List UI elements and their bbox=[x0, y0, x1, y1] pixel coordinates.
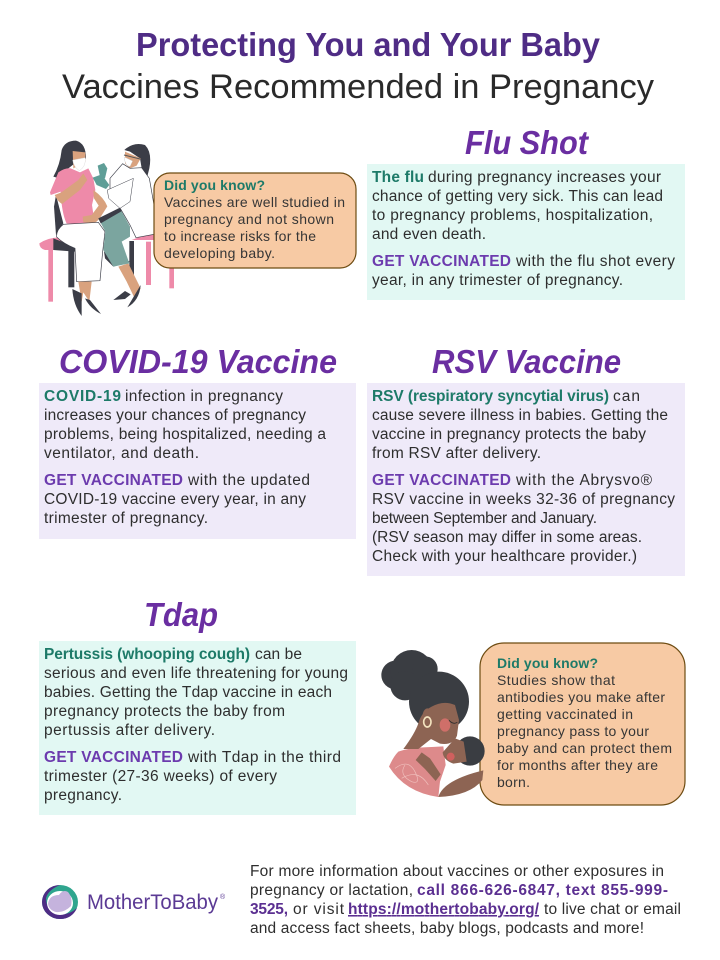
title bbox=[62, 26, 654, 106]
callout: did you know, antibodies: pregnancy pass to your bbox=[497, 723, 649, 739]
panel: flu shot: chance of getting very sick. This can lead bbox=[372, 188, 663, 205]
panel: tdap: serious and even life threatening for young bbox=[44, 665, 348, 682]
callout: did you know, antibodies: baby and can protect them bbox=[497, 740, 672, 756]
panel: tdap: pregnancy. bbox=[44, 787, 122, 804]
panel: tdap: pertussis after delivery. bbox=[44, 722, 215, 739]
logo: MotherToBaby: MotherToBaby bbox=[87, 891, 218, 914]
logo: MotherToBaby: ® bbox=[220, 893, 226, 901]
panel: covid-19 vaccine: ventilator, and death. bbox=[44, 445, 199, 462]
footer contact text bbox=[250, 863, 681, 937]
panel: tdap: GET VACCINATED bbox=[44, 749, 183, 766]
panel: rsv vaccine: GET VACCINATED bbox=[372, 472, 511, 489]
footer contact text: For more information about vaccines or other exposures in bbox=[250, 863, 664, 880]
footer contact text: to live chat or email bbox=[544, 901, 681, 918]
panel: flu shot: The flu bbox=[372, 169, 424, 186]
panel: tdap: Pertussis (whooping cough) bbox=[44, 646, 250, 663]
panel: covid-19 vaccine bbox=[39, 383, 356, 539]
panel: covid-19 vaccine: with the updated bbox=[187, 472, 310, 489]
panel: rsv vaccine: (RSV season may differ in some areas. bbox=[372, 529, 642, 546]
panel: tdap: can be bbox=[255, 646, 302, 663]
footer contact text: pregnancy or lactation, bbox=[250, 882, 413, 899]
panel: covid-19 vaccine: GET VACCINATED bbox=[44, 472, 183, 489]
footer contact text: and access fact sheets, baby blogs, podcasts and more! bbox=[250, 920, 644, 937]
panel: tdap: with Tdap in the third bbox=[187, 749, 341, 766]
panel: tdap: trimester (27-36 weeks) of every bbox=[44, 768, 277, 785]
panel: rsv vaccine: can bbox=[613, 388, 640, 405]
panel: covid-19 vaccine: problems, being hospitalized, needing a bbox=[44, 426, 326, 443]
callout: did you know, vaccines studied: Vaccines are well studied in bbox=[164, 194, 345, 210]
callout: did you know, vaccines studied bbox=[154, 173, 356, 268]
panel: tdap bbox=[39, 641, 356, 815]
callout: did you know, antibodies: Did you know? bbox=[497, 655, 598, 671]
panel: rsv vaccine bbox=[367, 383, 685, 576]
callout: did you know, antibodies bbox=[480, 643, 685, 805]
footer contact text: call 866-626-6847, text 855-999- bbox=[417, 882, 668, 899]
callout: did you know, antibodies: antibodies you make after bbox=[497, 689, 665, 705]
callout: did you know, vaccines studied: to increase risks for the bbox=[164, 228, 316, 244]
panel: flu shot: GET VACCINATED bbox=[372, 253, 511, 270]
panel: rsv vaccine: from RSV after delivery. bbox=[372, 445, 541, 462]
footer contact text: https://mothertobaby.org/ bbox=[348, 901, 540, 918]
callout: did you know, vaccines studied: pregnancy and not shown bbox=[164, 211, 334, 227]
panel: rsv vaccine: with the Abrysvo® bbox=[515, 472, 653, 489]
heading: covid-19 vaccine: COVID-19 Vaccine bbox=[59, 343, 337, 380]
illustration: pregnant woman receiving vaccine from a healthcare worker bbox=[39, 141, 174, 316]
panel: covid-19 vaccine: infection in pregnancy bbox=[125, 388, 283, 405]
panel: flu shot: year, in any trimester of pregnancy. bbox=[372, 272, 623, 289]
panel: covid-19 vaccine: COVID-19 vaccine every year, in any bbox=[44, 491, 306, 508]
illustration: mother kissing her baby bbox=[381, 650, 485, 797]
callout: did you know, antibodies: born. bbox=[497, 774, 530, 790]
panel: flu shot bbox=[367, 164, 685, 300]
title: Protecting You and Your Baby bbox=[136, 26, 601, 63]
footer contact text: 3525, bbox=[250, 901, 288, 918]
heading: tdap: Tdap bbox=[144, 596, 218, 633]
panel: covid-19 vaccine: trimester of pregnancy. bbox=[44, 510, 208, 527]
panel: rsv vaccine: vaccine in pregnancy protects the baby bbox=[372, 426, 646, 443]
callout: did you know, antibodies: Studies show that bbox=[497, 672, 615, 688]
panel: covid-19 vaccine: COVID-19 bbox=[44, 388, 121, 405]
panel: flu shot: with the flu shot every bbox=[515, 253, 675, 270]
panel: flu shot: to pregnancy problems, hospitalization, bbox=[372, 207, 653, 224]
callout: did you know, vaccines studied: Did you know? bbox=[164, 177, 265, 193]
panel: rsv vaccine: cause severe illness in babies. Getting the bbox=[372, 407, 668, 424]
panel: tdap: babies. Getting the Tdap vaccine in each bbox=[44, 684, 332, 701]
panel: rsv vaccine: RSV vaccine in weeks 32-36 of pregnancy bbox=[372, 491, 675, 508]
panel: flu shot: and even death. bbox=[372, 226, 486, 243]
panel: covid-19 vaccine: increases your chances of pregnancy bbox=[44, 407, 306, 424]
title: Vaccines Recommended in Pregnancy bbox=[62, 68, 654, 106]
callout: did you know, vaccines studied: developing baby. bbox=[164, 245, 275, 261]
heading: rsv vaccine: RSV Vaccine bbox=[432, 343, 621, 380]
logo: MotherToBaby bbox=[42, 885, 226, 919]
callout: did you know, antibodies: getting vaccinated in bbox=[497, 706, 633, 722]
heading: flu shot: Flu Shot bbox=[465, 124, 590, 161]
panel: tdap: pregnancy protects the baby from bbox=[44, 703, 285, 720]
panel: rsv vaccine: RSV (respiratory syncytial virus) bbox=[372, 388, 609, 405]
callout: did you know, antibodies: for months after they are bbox=[497, 757, 658, 773]
panel: rsv vaccine: Check with your healthcare provider.) bbox=[372, 548, 637, 565]
panel: rsv vaccine: between September and January. bbox=[372, 510, 597, 527]
footer contact text: or visit bbox=[293, 901, 345, 918]
panel: flu shot: during pregnancy increases your bbox=[428, 169, 661, 186]
